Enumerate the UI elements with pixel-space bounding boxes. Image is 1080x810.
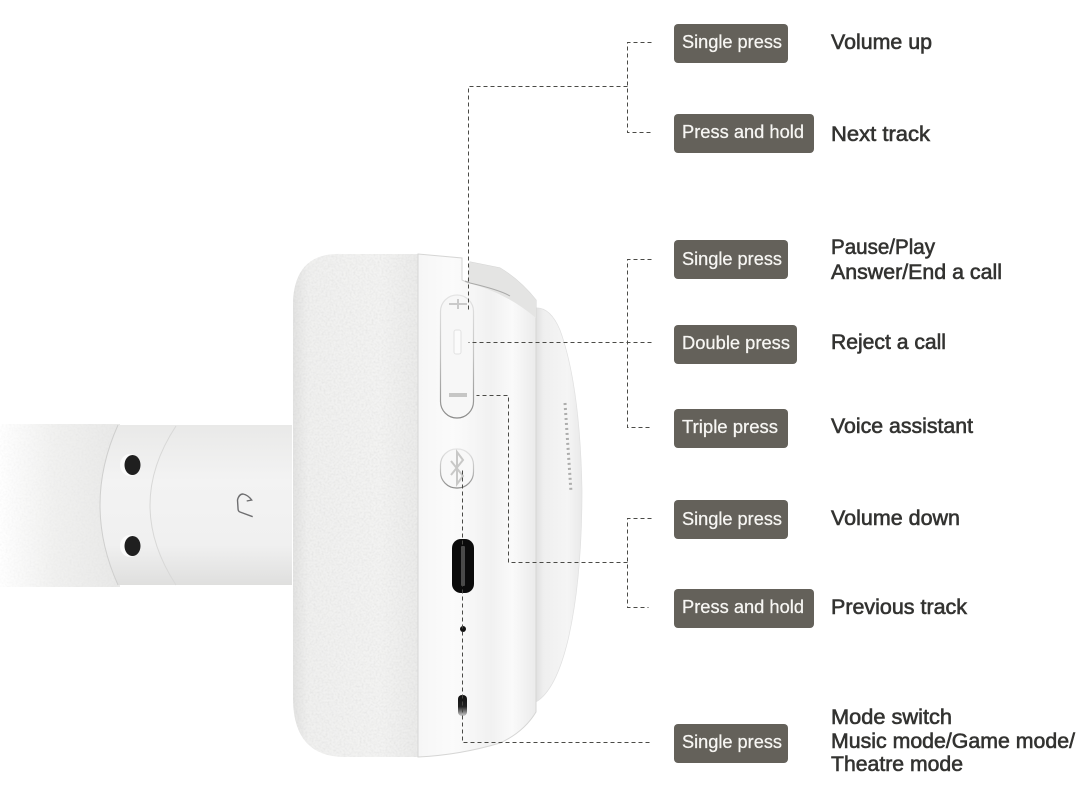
row: next track: Next track xyxy=(831,123,931,146)
row: pause and answer: Pause/Play xyxy=(831,236,935,259)
row: reject a call xyxy=(674,325,946,364)
row: pause and answer: Answer/End a call xyxy=(831,261,1002,284)
icon: right side mark xyxy=(238,494,253,517)
port: USB-C xyxy=(452,539,474,593)
row: next track: Press and hold xyxy=(682,122,804,142)
row: mode switch xyxy=(674,706,1075,776)
row: previous track: Press and hold xyxy=(682,597,804,617)
row: next track xyxy=(674,114,931,153)
connector: centre button group xyxy=(468,260,652,428)
button: volume rocker xyxy=(440,295,474,418)
icon: lower hinge screw xyxy=(120,535,140,557)
row: mode switch: Theatre mode xyxy=(831,753,963,776)
row: voice assistant xyxy=(674,409,973,448)
row: volume down: Volume down xyxy=(831,507,960,530)
ear cushion xyxy=(534,308,582,702)
housing xyxy=(418,254,536,757)
connector: volume down group xyxy=(476,396,652,608)
microphone hole xyxy=(460,626,466,632)
ear pad xyxy=(293,254,418,757)
mode switch slot xyxy=(458,695,467,716)
row: voice assistant: Triple press xyxy=(682,417,778,437)
row: pause and answer xyxy=(674,236,1002,284)
row: volume down xyxy=(674,500,960,539)
row: mode switch: Single press xyxy=(682,732,782,752)
row: voice assistant: Voice assistant xyxy=(831,415,973,438)
row: volume up xyxy=(674,24,932,63)
headband xyxy=(0,424,292,587)
row: previous track: Previous track xyxy=(831,596,968,619)
row: mode switch: Music mode/Game mode/ xyxy=(831,730,1075,753)
speaker perforations xyxy=(565,403,571,492)
row: volume up: Volume up xyxy=(831,31,932,54)
row: volume down: Single press xyxy=(682,509,782,529)
row: reject a call: Double press xyxy=(682,333,790,353)
row: pause and answer: Single press xyxy=(682,249,782,269)
connector: volume up group xyxy=(468,42,652,310)
row: volume up: Single press xyxy=(682,32,782,52)
row: previous track xyxy=(674,589,968,628)
row: reject a call: Reject a call xyxy=(831,331,946,354)
connector: mode switch xyxy=(462,470,652,742)
row: mode switch: Mode switch xyxy=(831,706,952,729)
icon: upper hinge screw xyxy=(120,454,140,476)
button: bluetooth xyxy=(440,449,474,488)
